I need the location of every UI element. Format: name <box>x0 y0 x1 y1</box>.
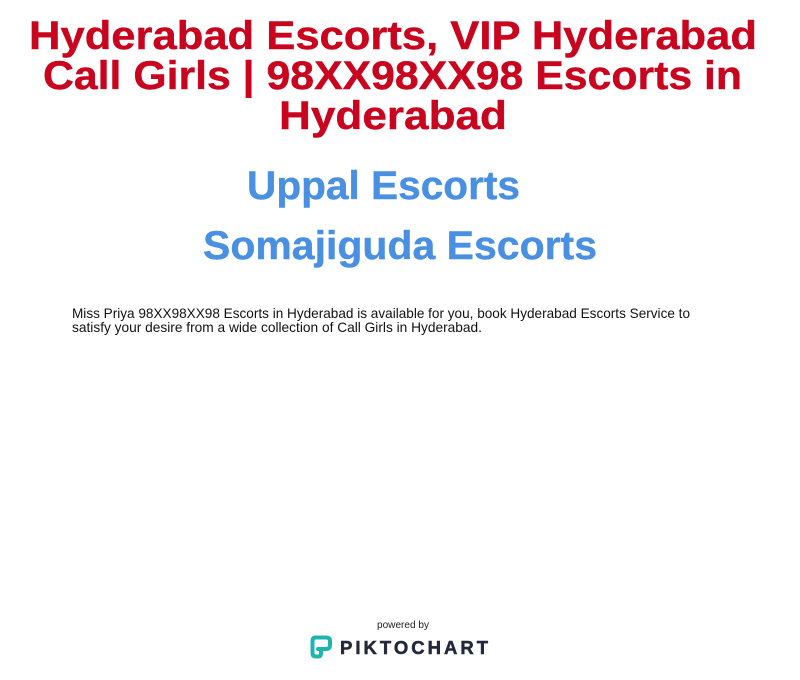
text block: description <box>72 305 690 335</box>
icon: Piktochart logo <box>312 638 330 656</box>
powered by label: powered by <box>377 620 429 631</box>
text block: description: satisfy your desire from a wide collection of Call Girls in Hyderabad. <box>72 319 482 335</box>
text block: description: Miss Priya 98XX98XX98 Escorts in Hyderabad is available for you, book Hyderabad Escorts Service to <box>72 305 690 321</box>
title: Hyderabad Escorts, VIP Hyderabad <box>29 14 757 58</box>
title: Hyderabad <box>279 94 507 138</box>
title: Call Girls | 98XX98XX98 Escorts in <box>43 54 742 98</box>
footer: powered by Piktochart <box>312 620 489 658</box>
heading: Uppal Escorts: Uppal Escorts <box>247 164 520 208</box>
Piktochart wordmark: PIKTOCHART <box>340 637 489 658</box>
title <box>29 14 757 138</box>
heading: Somajiguda Escorts: Somajiguda Escorts <box>203 224 597 268</box>
